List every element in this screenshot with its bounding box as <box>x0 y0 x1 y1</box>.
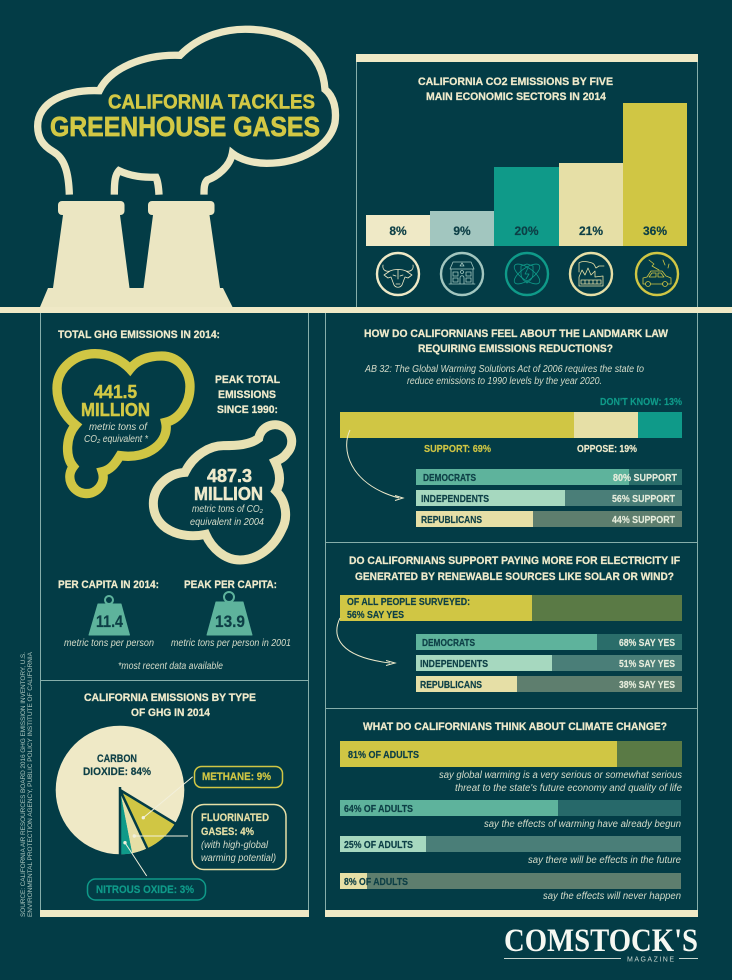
stacked bar: support, oppose, don't know: DON'T KNOW: 13% <box>600 397 682 408</box>
source note: ENVIRONMENTAL PROTECTION AGENCY, PUBLIC POLICY INSTITUTE OF CALIFORNIA <box>27 651 34 917</box>
cloud: cream 487.3 million <box>153 425 292 560</box>
icon: bull <box>377 253 419 295</box>
party support bars: 44% SUPPORT <box>612 515 676 526</box>
party yes bars: REPUBLICANS <box>420 680 482 691</box>
bar: 25 percent: 25% OF ADULTS <box>344 840 413 851</box>
heading <box>349 555 680 583</box>
party yes bars: INDEPENDENTS <box>420 659 488 670</box>
source note <box>20 651 34 917</box>
intro text: reduce emissions to 1990 levels by the year 2020. <box>407 376 602 387</box>
overall bar <box>340 595 682 621</box>
party support bars: REPUBLICANS <box>421 515 482 526</box>
callout: fluorinated gases <box>192 804 286 870</box>
bar: 25 percent <box>340 836 682 866</box>
heading: TOTAL GHG EMISSIONS IN 2014: <box>58 329 220 341</box>
stacked bar: support, oppose, don't know: SUPPORT: 69% <box>424 444 491 455</box>
bar: 25 percent: say there will be effects in the future <box>528 855 682 866</box>
arrow to party breakdown <box>347 430 403 500</box>
panel: CO2 emissions by sector <box>356 54 698 295</box>
intro text <box>364 364 644 387</box>
pie chart <box>56 726 184 855</box>
per capita 2014: metric tons per person <box>64 638 154 649</box>
bar: 64 percent <box>340 800 681 830</box>
thin panel frames <box>40 54 698 910</box>
logo: Comstock's Magazine: COMSTOCK'S <box>504 923 698 959</box>
heading: CALIFORNIA CO2 EMISSIONS BY FIVE <box>418 76 613 88</box>
heading: GENERATED BY RENEWABLE SOURCES LIKE SOLAR OR WIND? <box>355 571 674 583</box>
panel: landmark law survey <box>340 328 682 527</box>
bar: 81 percent: say global warming is a very serious or somewhat serious <box>439 770 682 781</box>
leader lines <box>124 777 193 876</box>
bar: 8 percent: 8% OF ADULTS <box>344 877 408 888</box>
intro text: AB 32: The Global Warming Solutions Act of 2006 requires the state to <box>364 364 644 375</box>
icon: atom with energy shield <box>506 253 548 295</box>
smoke cloud outline <box>38 29 335 195</box>
bar: 64 percent: say the effects of warming have already begun <box>484 819 681 830</box>
cloud: yellow 441.5 million <box>57 354 190 494</box>
heading: OF GHG IN 2014 <box>131 707 210 719</box>
footnote: *most recent data available <box>118 661 223 672</box>
heading <box>84 692 256 719</box>
party support bars: 56% SUPPORT <box>612 494 676 505</box>
per capita 2014 <box>58 579 159 649</box>
bar chart <box>366 103 687 246</box>
title <box>50 92 320 142</box>
cloud: yellow 441.5 million: CO₂ equivalent * <box>84 434 149 445</box>
bar: 8 percent: say the effects will never happen <box>543 891 681 902</box>
party yes bars: 38% SAY YES <box>619 680 675 691</box>
bar chart: 20% <box>514 224 539 238</box>
callout: nitrous oxide: NITROUS OXIDE: 3% <box>96 884 194 896</box>
heading: MAIN ECONOMIC SECTORS IN 2014 <box>426 91 606 103</box>
icon: factory <box>570 253 612 295</box>
cloud: cream 487.3 million: MILLION <box>194 483 263 504</box>
party support bars: INDEPENDENTS <box>421 494 489 505</box>
bar chart: 8% <box>389 224 407 238</box>
heading: REQUIRING EMISSIONS REDUCTIONS? <box>418 343 613 355</box>
title: CALIFORNIA TACKLES <box>108 92 315 114</box>
pie chart: CARBON <box>97 753 137 765</box>
cloud: yellow 441.5 million: 441.5 <box>94 381 137 402</box>
cloud: cream 487.3 million: 487.3 <box>207 465 252 486</box>
callout: nitrous oxide <box>88 879 206 900</box>
party yes bars <box>416 634 682 692</box>
party yes bars: 51% SAY YES <box>619 659 675 670</box>
bar: 81 percent <box>340 741 683 794</box>
arrow to party breakdown <box>337 618 395 666</box>
heading: CALIFORNIA EMISSIONS BY TYPE <box>84 692 256 704</box>
peak per capita: PEAK PER CAPITA: <box>184 579 277 591</box>
callout: fluorinated gases: FLUORINATED <box>201 812 269 824</box>
party support bars: 80% SUPPORT <box>613 473 678 484</box>
callout: methane: METHANE: 9% <box>202 771 271 783</box>
icon: car with exhaust <box>636 253 678 295</box>
pie chart: DIOXIDE: 84% <box>83 766 151 778</box>
callout: methane <box>194 766 282 788</box>
cloud: yellow 441.5 million: metric tons of <box>89 422 148 433</box>
stacked bar: support, oppose, don't know: OPPOSE: 19% <box>577 444 637 455</box>
icon: building <box>441 253 483 295</box>
per capita 2014: PER CAPITA IN 2014: <box>58 579 159 591</box>
bar chart: 36% <box>643 224 667 238</box>
heading: HOW DO CALIFORNIANS FEEL ABOUT THE LANDMARK LAW <box>364 328 669 340</box>
heading: WHAT DO CALIFORNIANS THINK ABOUT CLIMATE CHANGE? <box>363 721 667 733</box>
title: GREENHOUSE GASES <box>50 111 320 142</box>
per capita 2014: 11.4 <box>96 613 124 631</box>
bar: 64 percent: 64% OF ADULTS <box>344 804 413 815</box>
party support bars <box>416 469 682 527</box>
callout: fluorinated gases: GASES: 4% <box>201 826 254 838</box>
panel: climate change opinions <box>325 721 698 917</box>
bar: 8 percent <box>340 873 681 902</box>
cloud: yellow 441.5 million: MILLION <box>81 399 150 420</box>
bar chart: 9% <box>453 224 471 238</box>
overall bar: OF ALL PEOPLE SURVEYED: <box>347 597 470 608</box>
stacked bar: support, oppose, don't know <box>340 397 682 455</box>
peak total label <box>215 374 280 416</box>
panel: total GHG emissions <box>57 329 292 672</box>
peak total label: EMISSIONS <box>218 389 276 401</box>
bar chart: 21% <box>579 224 603 238</box>
header: smokestacks and cloud title <box>0 29 732 313</box>
panel: renewable electricity survey <box>337 555 682 692</box>
heading: DO CALIFORNIANS SUPPORT PAYING MORE FOR ELECTRICITY IF <box>349 555 680 567</box>
overall bar: 56% SAY YES <box>347 610 404 621</box>
smokestacks <box>40 201 232 307</box>
callout: fluorinated gases: warming potential) <box>201 853 276 864</box>
peak per capita: metric tons per person in 2001 <box>171 638 291 649</box>
party yes bars: DEMOCRATS <box>422 638 475 649</box>
cloud: cream 487.3 million: equivalent in 2004 <box>190 517 265 528</box>
bar: 81 percent: threat to the state's future economy and quality of life <box>455 783 683 794</box>
bar: 81 percent: 81% OF ADULTS <box>348 750 419 761</box>
source note: SOURCE: CALIFORNIA AIR RESOURCES BOARD 2016 GHG EMISSION INVENTORY, U.S. <box>20 652 27 917</box>
peak per capita: 13.9 <box>215 613 245 631</box>
cloud: cream 487.3 million: metric tons of CO₂ <box>192 504 263 515</box>
panel: emissions by type <box>40 692 309 917</box>
logo: Comstock's Magazine: MAGAZINE <box>627 956 674 964</box>
peak per capita <box>171 579 291 649</box>
peak total label: PEAK TOTAL <box>215 374 280 386</box>
ground line <box>0 307 732 313</box>
callout: fluorinated gases: (with high-global <box>201 840 269 851</box>
heading <box>364 328 669 355</box>
heading <box>418 76 613 103</box>
party yes bars: 68% SAY YES <box>619 638 675 649</box>
peak total label: SINCE 1990: <box>217 404 278 416</box>
party support bars: DEMOCRATS <box>423 473 476 484</box>
